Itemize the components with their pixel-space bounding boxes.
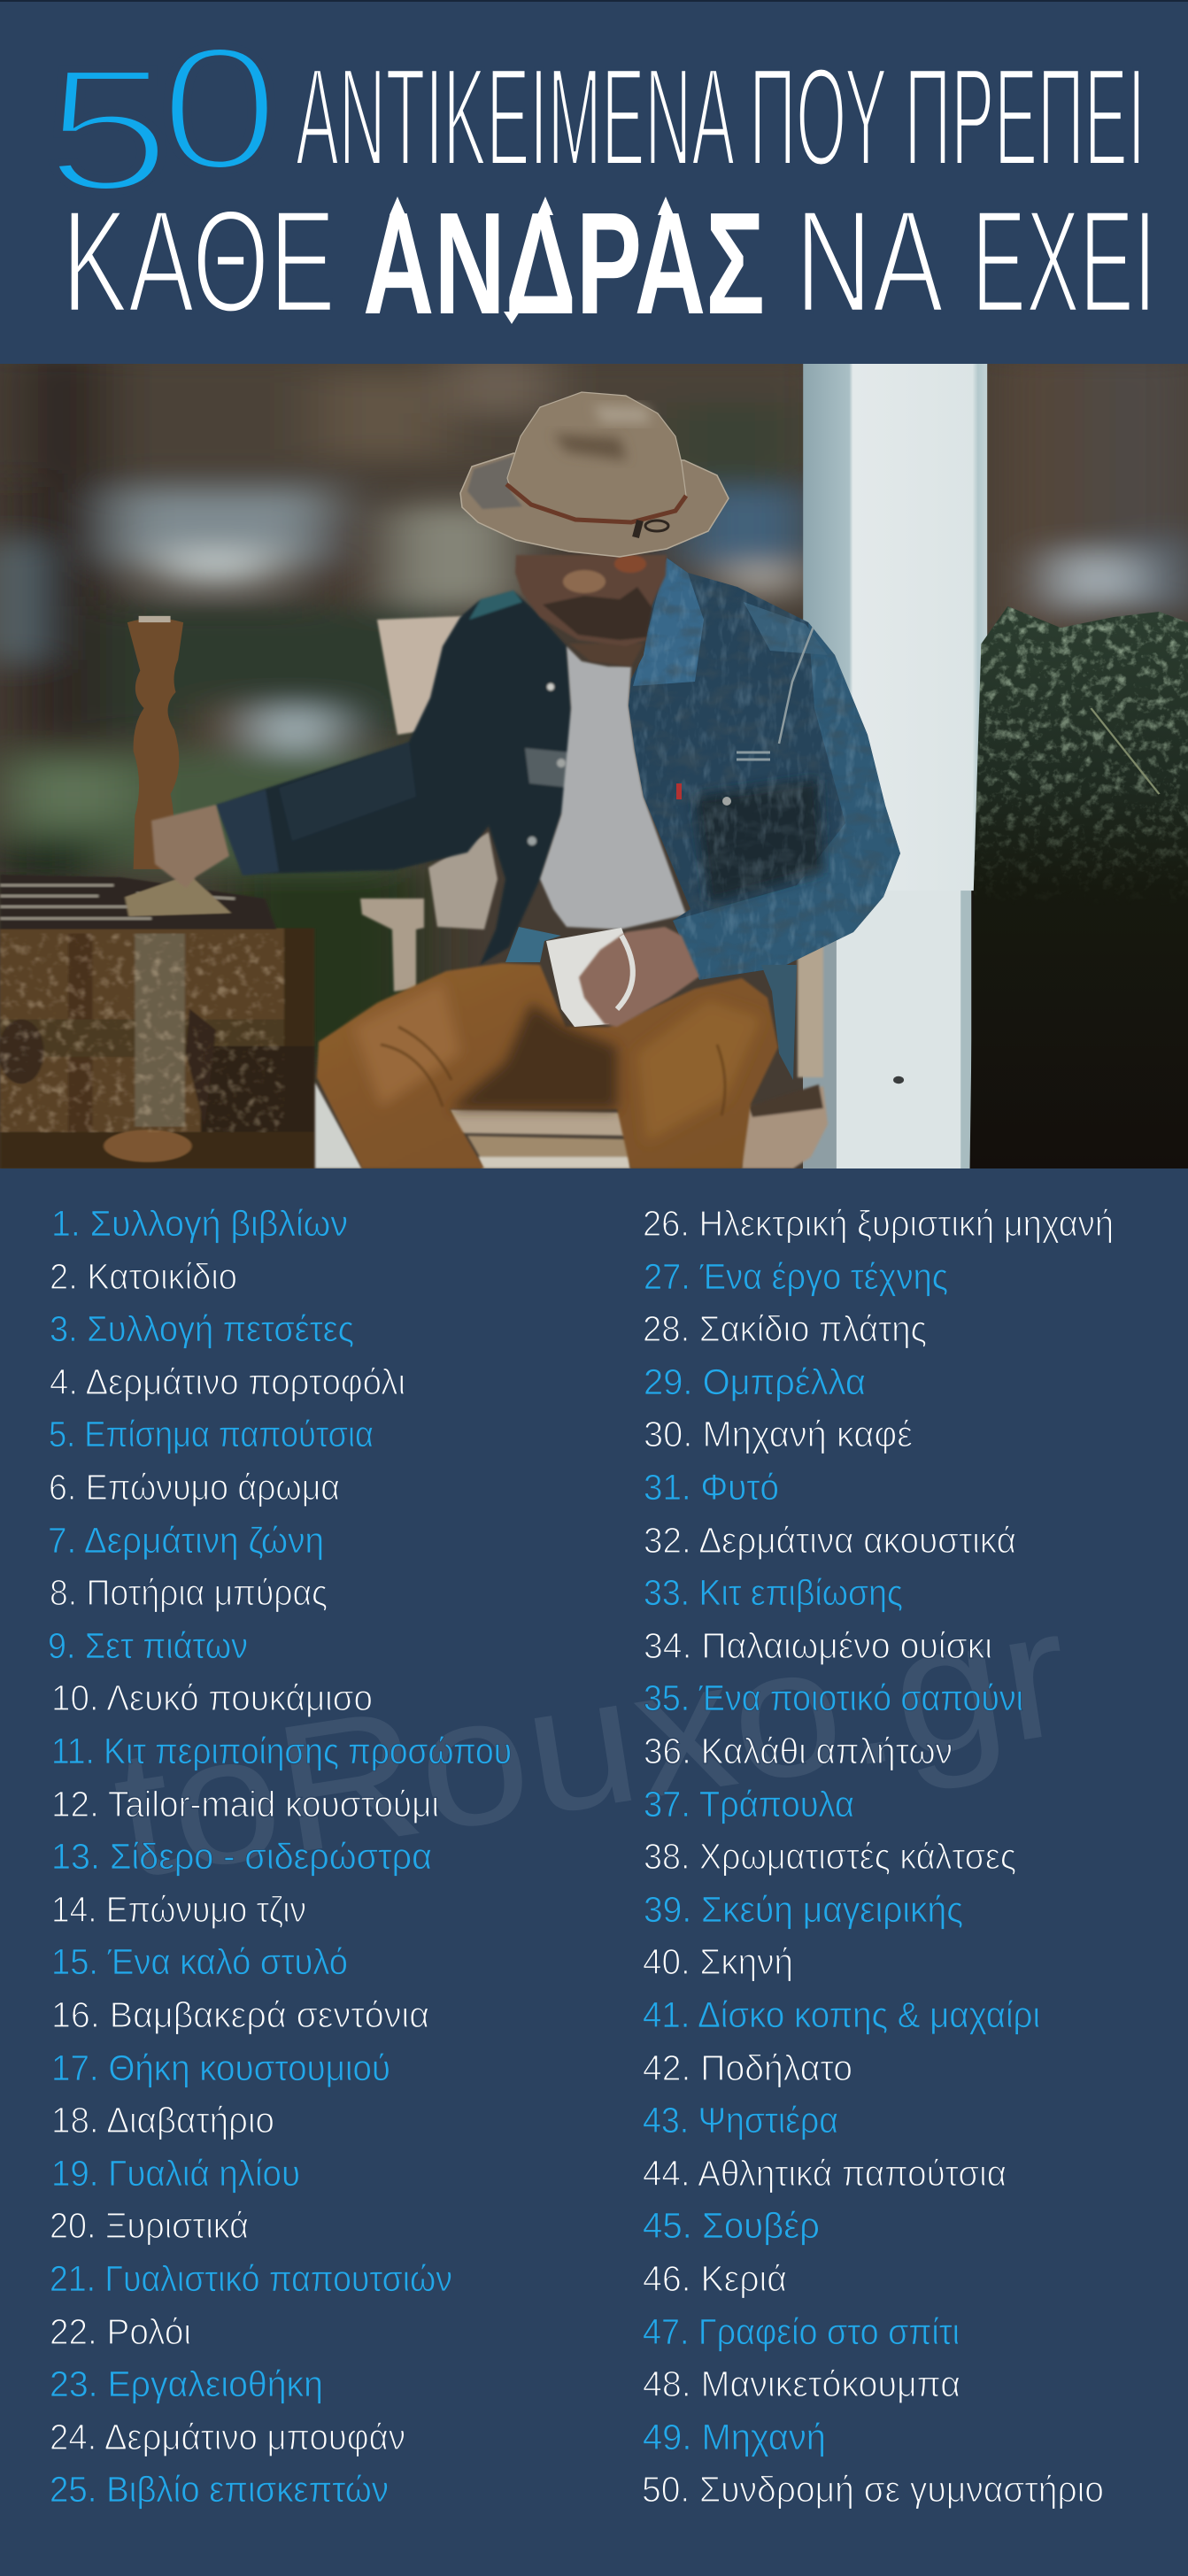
item 36: 36. Καλάθι απλήτων — [644, 1731, 953, 1771]
teal shirt hem — [505, 927, 561, 962]
title line two: ΑΝΔΡΑΣ — [363, 182, 765, 344]
item 47: 47. Γραφείο στο σπίτι — [643, 2311, 960, 2352]
photo: man in hat on porch — [0, 354, 1188, 1168]
item 22: 22. Ρολόι — [50, 2311, 191, 2352]
trunk — [0, 875, 314, 1168]
neck and face — [515, 555, 667, 667]
wooden post — [127, 619, 183, 869]
item 13: 13. Σίδερο - σιδερώστρα — [51, 1836, 432, 1877]
hat brim — [460, 453, 729, 557]
item 15: 15. Ένα καλό στυλό — [51, 1941, 348, 1982]
item 17: 17. Θήκη κουστουμιού — [51, 2048, 390, 2088]
item 50: 50. Συνδρομή σε γυμναστήριο — [642, 2469, 1104, 2510]
item 25: 25. Βιβλίο επισκεπτών — [50, 2469, 389, 2510]
item 30: 30. Μηχανή καφέ — [644, 1414, 913, 1454]
item 33: 33. Κιτ επιβίωσης — [644, 1572, 903, 1613]
bush — [970, 606, 1188, 1168]
item 48: 48. Μανικετόκουμπα — [643, 2364, 960, 2404]
item 14: 14. Επώνυμο τζιν — [51, 1889, 306, 1930]
list column two — [642, 1203, 1114, 2510]
item 28: 28. Σακίδιο πλάτης — [643, 1308, 927, 1349]
item 45: 45. Σουβέρ — [643, 2205, 820, 2246]
hat — [460, 392, 729, 557]
item 38: 38. Χρωματιστές κάλτσες — [644, 1836, 1016, 1877]
item 11: 11. Κιτ περιποίησης προσώπου — [51, 1731, 512, 1771]
jacket dark side and sleeve — [216, 590, 573, 965]
white porch column — [803, 364, 987, 1168]
jacket blue side — [620, 549, 912, 1080]
title line two: ΝΑ — [795, 180, 944, 343]
item 9: 9. Σετ πιάτων — [48, 1625, 248, 1666]
item 12: 12. Tailor-maid κουστούμι — [51, 1784, 439, 1824]
list column one — [48, 1203, 512, 2510]
item 37: 37. Τράπουλα — [644, 1784, 854, 1824]
item 23: 23. Εργαλειοθήκη — [50, 2364, 323, 2404]
item 39: 39. Σκεύη μαγειρικής — [644, 1889, 963, 1930]
item 32: 32. Δερμάτινα ακουστικά — [644, 1520, 1016, 1561]
item 31: 31. Φυτό — [644, 1467, 779, 1508]
item 7: 7. Δερμάτινη ζώνη — [48, 1520, 324, 1561]
trousers — [317, 963, 778, 1168]
item 43: 43. Ψηστιέρα — [643, 2100, 838, 2140]
item 10: 10. Λευκό πουκάμισο — [51, 1677, 373, 1718]
blurred garden background — [0, 354, 1188, 1062]
title number 50: 0 — [159, 11, 280, 207]
item 34: 34. Παλαιωμένο ουίσκι — [644, 1625, 992, 1666]
left hand — [151, 805, 229, 888]
item 2: 2. Κατοικίδιο — [50, 1256, 237, 1297]
item 27: 27. Ένα έργο τέχνης — [644, 1256, 948, 1297]
title line two — [62, 180, 1156, 344]
item 24: 24. Δερμάτινο μπουφάν — [50, 2417, 405, 2457]
item 18: 18. Διαβατήριο — [51, 2100, 274, 2140]
hat crown — [506, 391, 687, 496]
item 8: 8. Ποτήρια μπύρας — [50, 1572, 328, 1613]
title line two: ΚΑΘΕ — [62, 180, 336, 343]
item 46: 46. Κεριά — [643, 2258, 787, 2299]
watermark: toRouxo.gr — [102, 1570, 1082, 1917]
item 1: 1. Συλλογή βιβλίων — [51, 1203, 348, 1244]
item 40: 40. Σκηνή — [643, 1941, 793, 1982]
item 16: 16. Βαμβακερά σεντόνια — [51, 1994, 429, 2035]
item 49: 49. Μηχανή — [643, 2417, 826, 2457]
mug — [546, 928, 624, 1027]
chair — [315, 616, 828, 1168]
item 21: 21. Γυαλιστικό παπουτσιών — [50, 2258, 452, 2299]
item 26: 26. Ηλεκτρική ξυριστική μηχανή — [643, 1203, 1114, 1244]
item 42: 42. Ποδήλατο — [643, 2048, 852, 2088]
item 3: 3. Συλλογή πετσέτες — [50, 1308, 354, 1349]
man — [151, 392, 912, 1168]
title — [44, 11, 1156, 344]
item 41: 41. Δίσκο κοπης & μαχαίρι — [643, 1994, 1040, 2035]
title number 50: 5 — [44, 32, 172, 228]
t-shirt — [540, 646, 686, 929]
item 20: 20. Ξυριστικά — [50, 2205, 249, 2246]
hat band — [506, 484, 686, 522]
title number 50 — [44, 11, 280, 228]
item 35: 35. Ένα ποιοτικό σαπούνι — [644, 1677, 1023, 1718]
item 44: 44. Αθλητικά παπούτσια — [643, 2153, 1007, 2194]
item 29: 29. Ομπρέλλα — [644, 1361, 866, 1402]
item 19: 19. Γυαλιά ηλίου — [51, 2153, 300, 2194]
item 4: 4. Δερμάτινο πορτοφόλι — [50, 1361, 405, 1402]
item 5: 5. Επίσημα παπούτσια — [49, 1414, 374, 1454]
right hand — [579, 927, 699, 1027]
item 6: 6. Επώνυμο άρωμα — [49, 1467, 340, 1508]
